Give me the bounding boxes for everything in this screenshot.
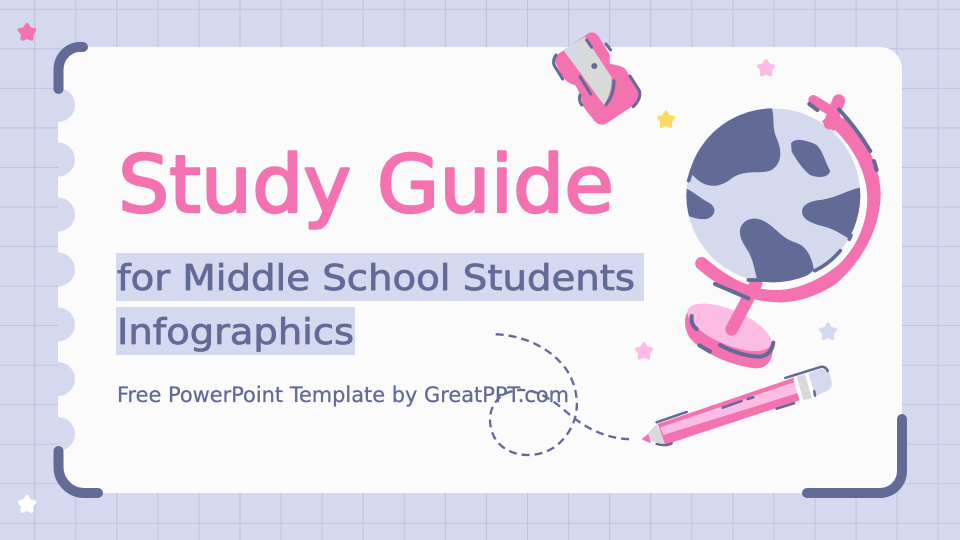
title: Study Guide — [118, 139, 614, 231]
globe outline accents — [715, 104, 877, 298]
dashed flight path — [490, 334, 633, 455]
panel: notebook paper card — [58, 47, 902, 493]
star: white bottom left — [19, 496, 35, 511]
star: yellow — [658, 112, 674, 126]
globe sphere with continents — [686, 108, 860, 282]
corner bracket: bottom left — [58, 451, 98, 493]
corner bracket: bottom right — [807, 419, 902, 493]
icon: pencil sharpener — [554, 32, 641, 125]
subtitle line 1 with highlight: for Middle School Students — [117, 258, 635, 299]
icon: pencil — [643, 367, 832, 445]
attribution text: Free PowerPoint Template by GreatPPT.com — [117, 383, 569, 407]
star: light pink lower — [636, 344, 652, 358]
globe top pivot — [813, 100, 845, 131]
subtitle line 2 with highlight: Infographics — [117, 312, 354, 353]
star: lavender — [820, 324, 836, 338]
corner bracket: top left — [58, 47, 83, 89]
icon: globe — [680, 100, 881, 368]
globe neck — [732, 283, 756, 329]
globe meridian arm — [695, 116, 881, 302]
star: light pink top — [758, 60, 774, 75]
globe base — [681, 294, 778, 368]
star: pink top left — [19, 24, 35, 39]
